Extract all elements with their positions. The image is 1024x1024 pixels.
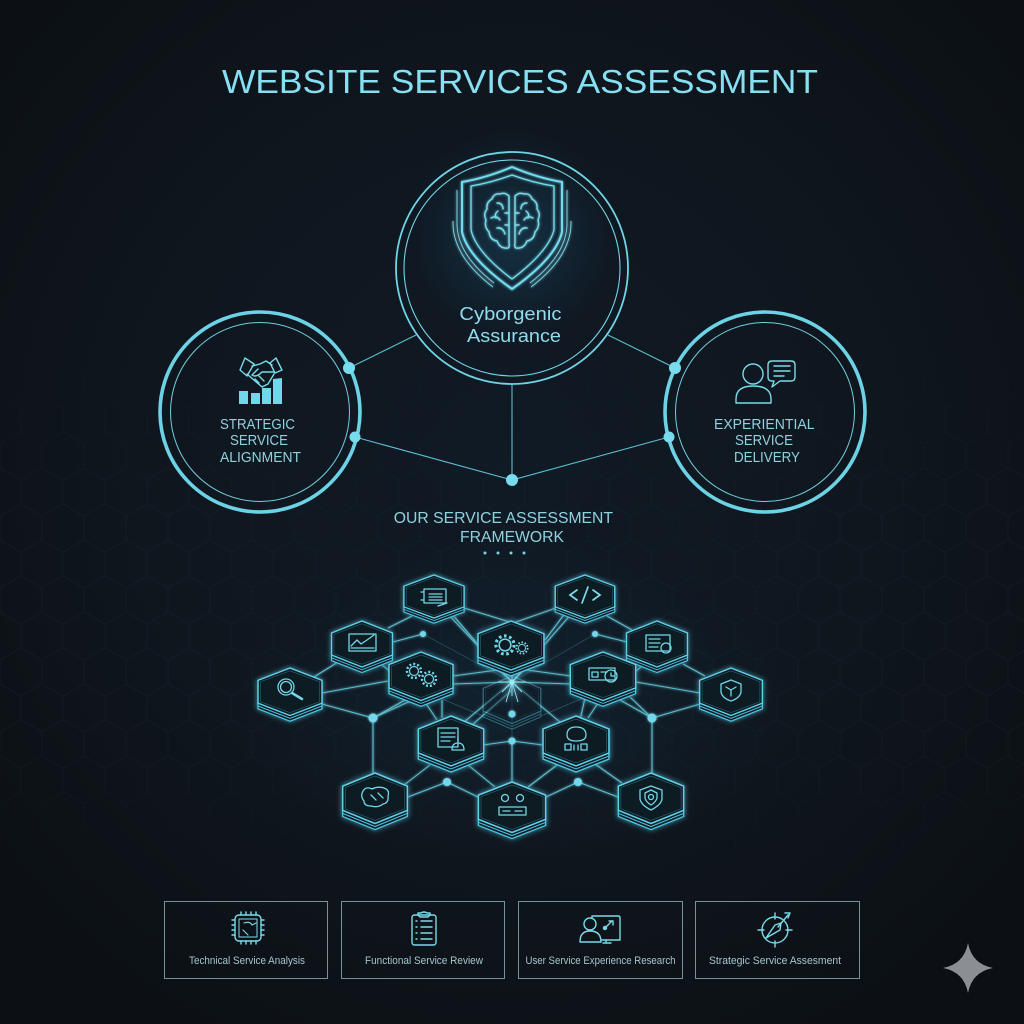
connector nodes [343, 362, 681, 486]
heading: framework: FRAMEWORK [460, 529, 564, 546]
network nodes [368, 631, 656, 786]
hexagon: magnifier [258, 668, 322, 721]
icon: shield with brain [453, 167, 571, 289]
hexagon: central gear [478, 621, 544, 676]
text: experiential service delivery: EXPERIENTIAL [714, 417, 814, 433]
icon: user at monitor [580, 916, 620, 943]
icon: sparkle watermark [943, 943, 993, 993]
hexagon: gauge panel [570, 652, 636, 706]
icon: compass target [758, 913, 792, 947]
icon: handshake with bars [239, 358, 282, 404]
hexagon: code [555, 575, 615, 623]
icon: chip [232, 912, 264, 944]
panel: strategic service assesment [696, 902, 860, 978]
text: strategic service alignment: STRATEGIC [220, 417, 295, 433]
hexagon: document user [418, 716, 484, 772]
hexagon: document settings [627, 621, 687, 673]
text: cyborgenic assurance: Cyborgenic [459, 303, 561, 324]
hexagon: chart [332, 621, 392, 673]
central faint hexagon [483, 676, 541, 729]
label: strategic service assesment: Strategic Service Assesment [709, 955, 841, 967]
central burst [498, 668, 526, 702]
panel: functional service review [342, 902, 504, 978]
connector lines between circles [349, 335, 675, 480]
network links [314, 608, 705, 797]
text: experiential service delivery: DELIVERY [734, 450, 800, 466]
hexagon: shield bottom [618, 773, 684, 830]
text: experiential service delivery: SERVICE [735, 433, 793, 449]
text: strategic service alignment: SERVICE [230, 433, 288, 449]
label: user service experience research: User Service Experience Research [526, 955, 676, 967]
network diagram [258, 575, 762, 839]
pagination dots [484, 552, 526, 554]
icon: clipboard [412, 912, 436, 945]
text: cyborgenic assurance: Assurance [467, 325, 561, 346]
label: technical service analysis: Technical Service Analysis [189, 955, 305, 967]
hexagon: robot user [543, 716, 609, 772]
heading: framework: OUR SERVICE ASSESSMENT [394, 510, 613, 527]
hexagon: bottom controls [478, 782, 546, 839]
panel: cyborgenic assurance [396, 152, 628, 384]
hexagon: shield right [700, 668, 762, 721]
title: WEBSITE SERVICES ASSESSMENT [222, 63, 818, 100]
hexagon: gears [389, 652, 453, 706]
hexagon: document [404, 575, 464, 623]
panel: technical service analysis [164, 902, 328, 978]
panel: experiential service delivery [665, 312, 865, 512]
icon: person with speech bubble [736, 361, 795, 403]
panel: strategic service alignment [160, 312, 360, 512]
panel: user service experience research [518, 902, 682, 978]
text: strategic service alignment: ALIGNMENT [220, 450, 301, 466]
label: functional service review: Functional Service Review [365, 955, 483, 967]
hexagon: puzzle [343, 773, 407, 830]
